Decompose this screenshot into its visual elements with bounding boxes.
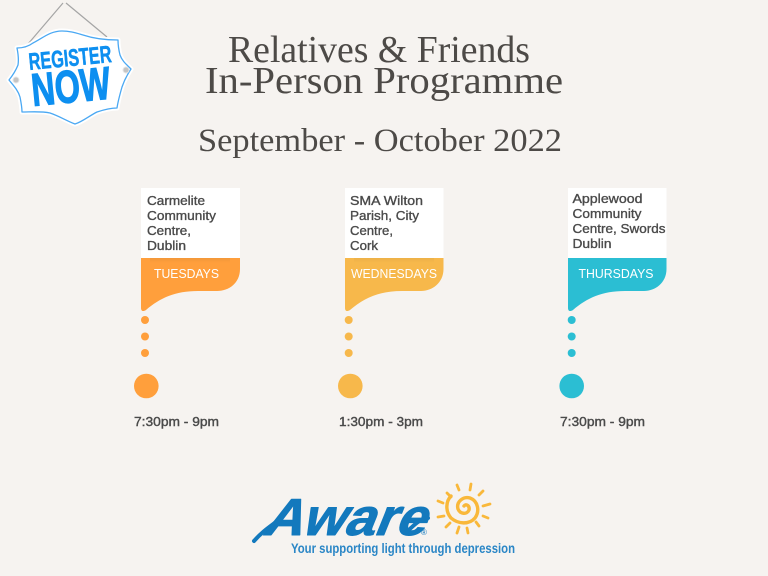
venue text: SMA Wilton [350, 193, 423, 208]
venue text: Centre, Swords [572, 221, 666, 236]
timeline dots [141, 316, 149, 357]
title: Relatives & Friends [228, 29, 530, 71]
time: 7:30pm - 9pm [560, 414, 645, 429]
venue text: Centre, [147, 223, 191, 238]
sign board [9, 31, 131, 124]
sign rivets [13, 67, 129, 83]
panel: Tuesdays [134, 188, 240, 429]
sign hanging string [28, 3, 107, 44]
venue text: Centre, [350, 223, 393, 238]
day flag [568, 258, 666, 311]
venue card [141, 188, 240, 258]
sign text: NOW [29, 57, 113, 116]
venue text: Community [572, 206, 642, 221]
day label: TUESDAYS [154, 267, 219, 281]
timeline marker [134, 374, 159, 398]
timeline marker [559, 374, 584, 398]
aware logo [254, 484, 515, 556]
day label: WEDNESDAYS [351, 267, 437, 281]
register now sign [9, 3, 131, 124]
logo wordmark: Aware [257, 489, 443, 547]
venue text: Carmelite [147, 193, 205, 208]
venue card [568, 188, 666, 258]
logo swoosh [254, 518, 428, 541]
sign text [27, 41, 113, 116]
venue text: Dublin [572, 236, 612, 251]
logo tagline: Your supporting light through depression [291, 541, 515, 556]
day flag [141, 258, 240, 311]
venue text [572, 191, 666, 251]
timeline dots [345, 316, 353, 357]
title: In-Person Programme [205, 60, 563, 102]
venue text: Cork [350, 238, 379, 253]
venue text: Dublin [147, 238, 186, 253]
timeline dots [568, 316, 576, 357]
icon: sun [438, 484, 490, 533]
title [205, 29, 563, 102]
day flag [345, 258, 444, 311]
venue text: Community [147, 208, 217, 223]
subtitle: dates: September - October 2022 [198, 123, 562, 159]
timeline marker [338, 374, 363, 398]
sign text: REGISTER [27, 41, 113, 76]
time: 1:30pm - 3pm [339, 414, 423, 429]
venue card [345, 188, 444, 258]
registered mark: ® [421, 528, 427, 537]
panel: Thursdays [559, 188, 666, 429]
venue text: Applewood [572, 191, 642, 206]
venue text: Parish, City [350, 208, 420, 223]
day label: THURSDAYS [578, 267, 654, 281]
venue text [350, 193, 423, 253]
venue text [147, 193, 217, 253]
panel: Wednesdays [338, 188, 444, 429]
time: 7:30pm - 9pm [134, 414, 219, 429]
